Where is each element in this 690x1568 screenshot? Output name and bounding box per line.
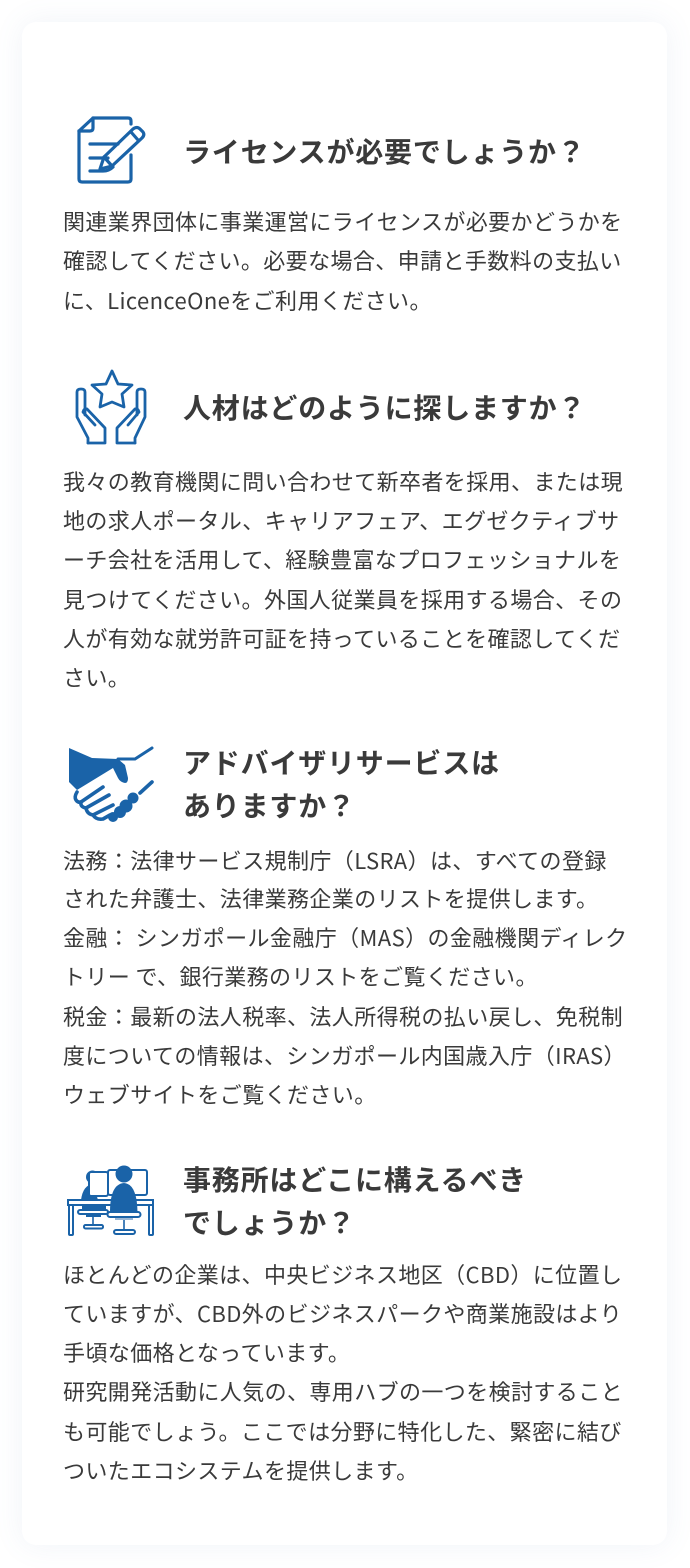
text: 金融： シンガポール金融庁（MAS）の金融機関ディレク <box>63 921 628 953</box>
text: に、LicenceOneをご利用ください。 <box>63 284 432 316</box>
text: 事務所はどこに構えるべき <box>183 1159 527 1199</box>
text: ついたエコシステムを提供します。 <box>63 1454 419 1486</box>
heading: advisory <box>183 742 500 825</box>
text: された弁護士、法律業務企業のリストを提供します。 <box>63 882 598 914</box>
text: 関連業界団体に事業運営にライセンスが必要かどうかを <box>63 205 623 237</box>
text: ほとんどの企業は、中央ビジネス地区（CBD）に位置し <box>63 1258 622 1290</box>
text: talent body <box>63 465 623 693</box>
text: でしょうか？ <box>183 1202 356 1242</box>
text: 確認してください。必要な場合、申請と手数料の支払い <box>63 244 622 276</box>
text: 研究開発活動に人気の、専用ハブの一つを検討すること <box>63 1375 623 1407</box>
text: advisory body <box>63 844 628 1110</box>
text: ていますが、CBD外のビジネスパークや商業施設はより <box>63 1297 622 1329</box>
text: 見つけてください。外国人従業員を採用する場合、その <box>63 583 622 615</box>
text: 度についての情報は、シンガポール内国歳入庁（IRAS） <box>63 1039 626 1071</box>
text: 税金：最新の法人税率、法人所得税の払い戻し、免税制 <box>63 1000 623 1032</box>
text: office body <box>63 1258 623 1486</box>
heading: license: ライセンスが必要でしょうか？ <box>183 131 586 171</box>
icon: document and pen <box>77 116 146 184</box>
icon: office desk workers <box>67 1166 154 1236</box>
icon: hands and star <box>76 370 146 444</box>
text: 手頃な価格となっています。 <box>63 1336 350 1368</box>
text: ウェブサイトをご覧ください。 <box>63 1078 377 1110</box>
icon: handshake <box>69 746 154 822</box>
text: ーチ会社を活用して、経験豊富なプロフェッショナルを <box>63 543 621 575</box>
text: 我々の教育機関に問い合わせて新卒者を採用、または現 <box>63 465 623 497</box>
text: 人が有効な就労許可証を持っていることを確認してくだ <box>63 622 621 654</box>
text: も可能でしょう。ここでは分野に特化した、緊密に結び <box>63 1415 622 1447</box>
text: 地の求人ポータル、キャリアフェア、エグゼクティブサ <box>63 504 619 536</box>
heading: talent: 人材はどのように探しますか？ <box>183 387 586 427</box>
text: 法務：法律サービス規制庁（LSRA）は、すべての登録 <box>63 844 607 876</box>
text: license body <box>63 205 623 316</box>
heading: office <box>183 1159 527 1242</box>
text: アドバイザリサービスは <box>183 742 500 782</box>
text: ありますか？ <box>183 785 356 825</box>
text: さい。 <box>63 661 130 693</box>
text: トリー で、銀行業務のリストをご覧ください。 <box>63 960 538 992</box>
